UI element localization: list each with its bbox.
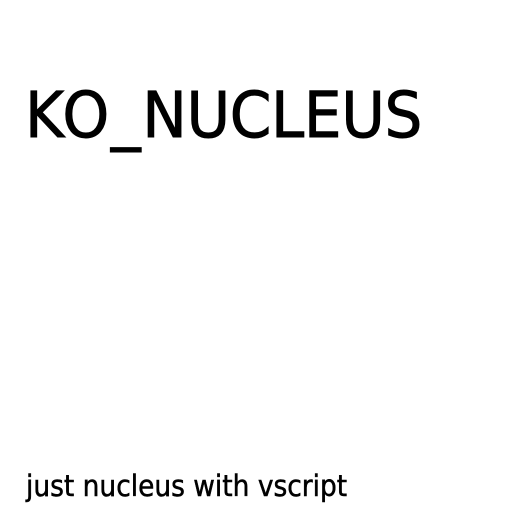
title: KO_NUCLEUS — [25, 79, 422, 152]
caption text: just nucleus with vscript — [26, 468, 347, 502]
